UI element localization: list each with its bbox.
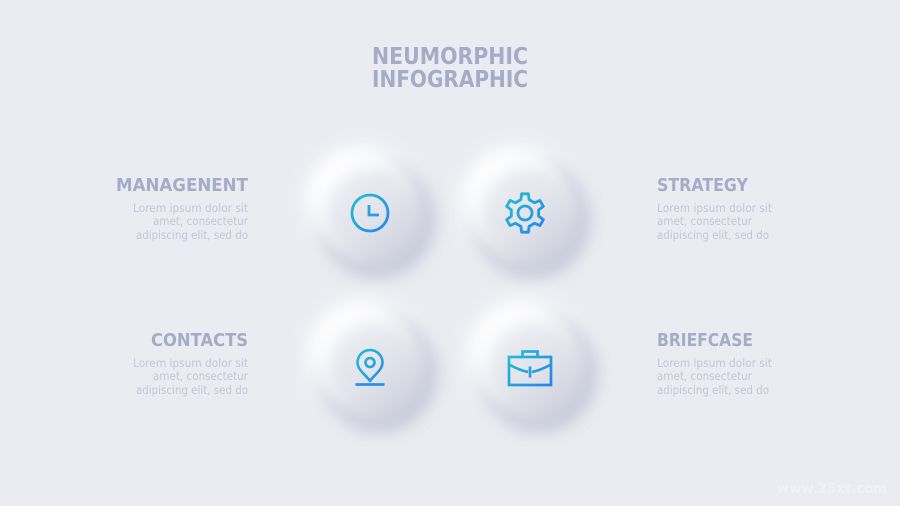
sphere: bottom right bbox=[465, 297, 595, 430]
text block: managenent bbox=[116, 175, 249, 242]
title: INFOGRAPHIC bbox=[372, 67, 528, 93]
text block: strategy: amet, consectetur bbox=[657, 214, 752, 228]
icon: gear bbox=[507, 194, 543, 232]
text block: strategy: Lorem ipsum dolor sit bbox=[657, 201, 772, 215]
icon: map pin bbox=[356, 350, 384, 384]
text block: briefcase bbox=[657, 330, 772, 397]
text block: briefcase: Lorem ipsum dolor sit bbox=[657, 356, 772, 370]
text block: briefcase: amet, consectetur bbox=[657, 369, 752, 383]
text block: strategy: adipiscing elit, sed do bbox=[657, 228, 769, 242]
watermark: www.25xt.com bbox=[777, 481, 887, 497]
text block: managenent: MANAGENENT bbox=[116, 175, 249, 196]
text block: managenent: amet, consectetur bbox=[153, 214, 248, 228]
icon: briefcase bbox=[509, 352, 551, 385]
text block: briefcase: adipiscing elit, sed do bbox=[657, 383, 769, 397]
text block: managenent: adipiscing elit, sed do bbox=[136, 228, 248, 242]
text block: contacts: Lorem ipsum dolor sit bbox=[133, 356, 248, 370]
text block: contacts: adipiscing elit, sed do bbox=[136, 383, 248, 397]
sphere: top right bbox=[458, 143, 588, 276]
text block: contacts: CONTACTS bbox=[151, 330, 248, 351]
title: NEUMORPHIC bbox=[372, 44, 528, 70]
text block: managenent: Lorem ipsum dolor sit bbox=[133, 201, 248, 215]
sphere: top left bbox=[303, 143, 433, 276]
icon: clock bbox=[352, 195, 388, 231]
text block: contacts: amet, consectetur bbox=[153, 369, 248, 383]
title bbox=[372, 44, 528, 93]
text block: briefcase: BRIEFCASE bbox=[657, 330, 753, 351]
text block: contacts bbox=[133, 330, 248, 397]
sphere: bottom left bbox=[305, 297, 435, 430]
text block: strategy bbox=[657, 175, 772, 242]
text block: strategy: STRATEGY bbox=[657, 175, 749, 196]
